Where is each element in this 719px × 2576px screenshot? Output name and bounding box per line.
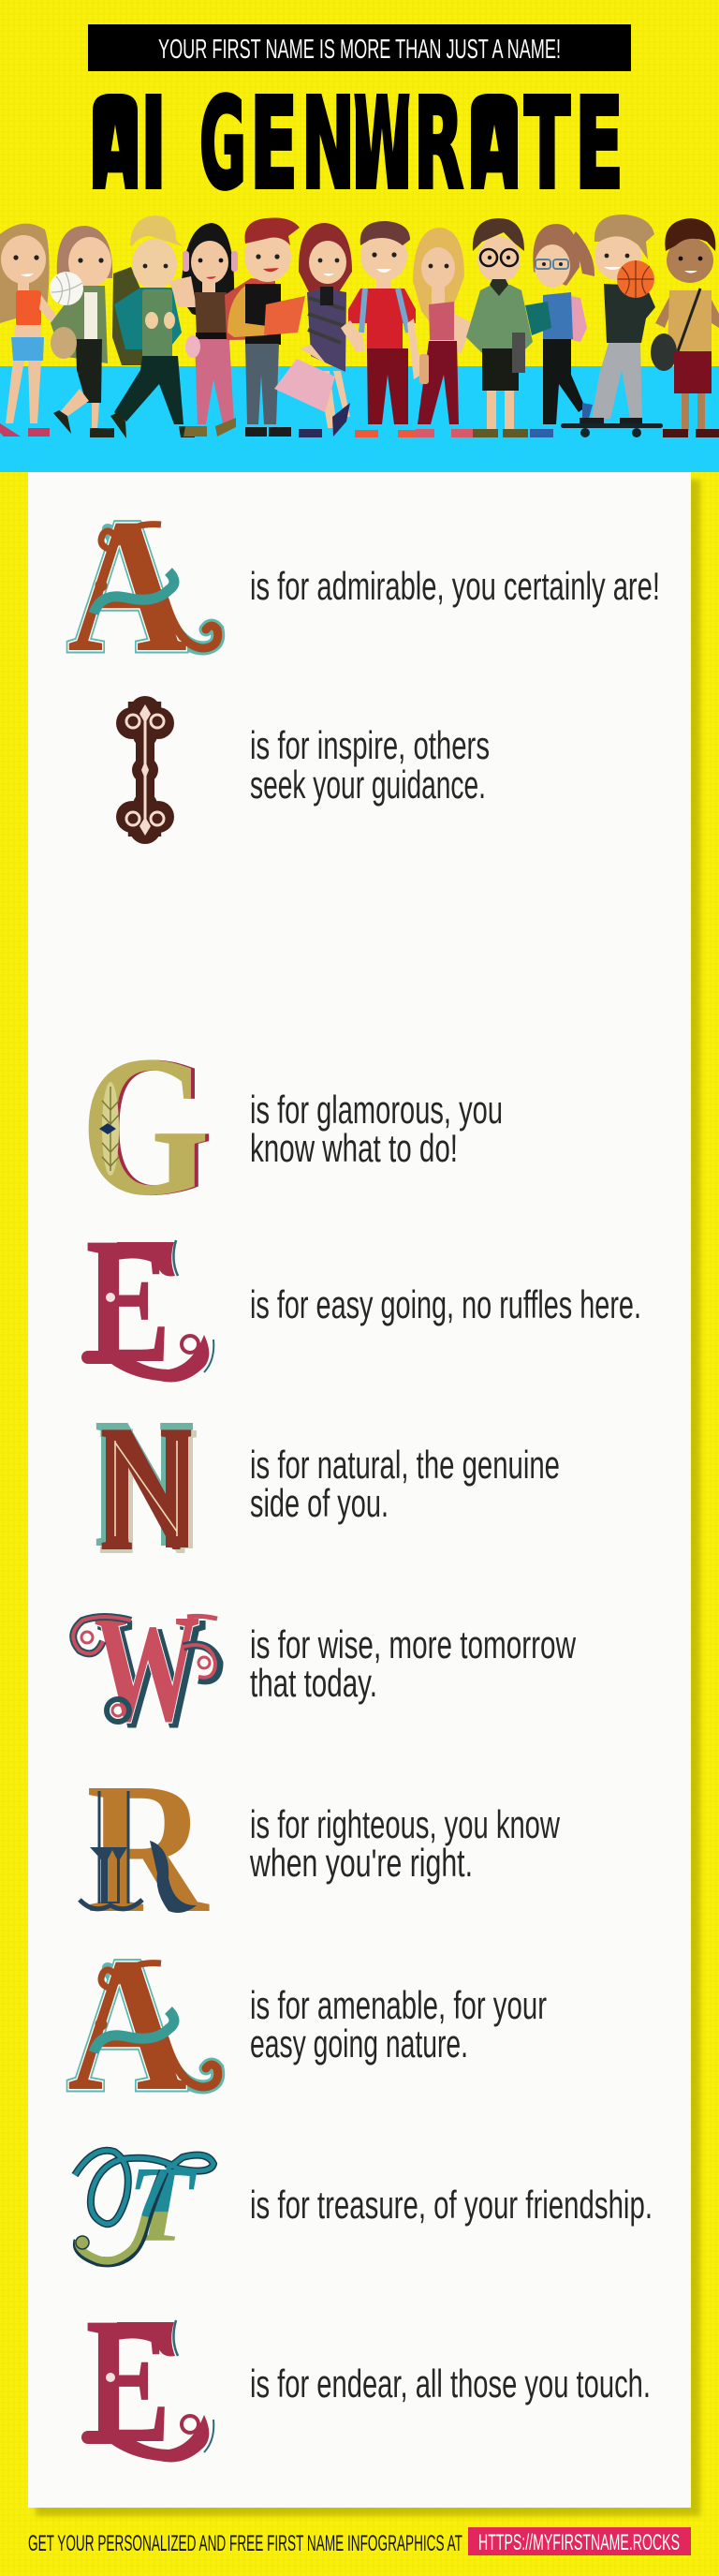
character: girl with ponytail and tablet [525, 224, 594, 437]
character: boy in yellow tank top [651, 218, 719, 437]
character: girl in orange top [0, 224, 62, 437]
title: AI GENWRATE: N [301, 73, 355, 217]
description: natural: is for natural, the genuine [250, 1443, 560, 1487]
title: AI GENWRATE: E [575, 73, 624, 217]
character: girl with pink bag [274, 223, 352, 437]
description: wise: is for wise, more tomorrow [250, 1622, 576, 1666]
ornamental letter A: A [67, 1918, 187, 2131]
letter row: I: seek your guidance. [250, 762, 486, 807]
letter row: A second: easy going nature. [250, 2021, 468, 2065]
character: boy in red shirt [341, 221, 426, 437]
ornamental letter N: N [97, 1387, 198, 1594]
letter row: W [73, 1582, 576, 1757]
white panel [28, 472, 691, 2508]
character: boy with cap and backpack [110, 215, 195, 438]
letter row: N: side of you. [250, 1481, 389, 1525]
letter row: R [80, 1745, 560, 1952]
ornamental letter E: E [86, 1203, 170, 1399]
letter row: W: that today. [250, 1661, 377, 1705]
letter row: I [116, 653, 490, 881]
description: amenable: is for amenable, for your [250, 1983, 547, 2027]
letter row: R: when you're right. [249, 1841, 473, 1885]
ornamental letter I [116, 653, 174, 881]
description: glamorous: is for glamorous, you [250, 1088, 503, 1132]
ornamental letter R: R [86, 1745, 210, 1952]
description: righteous: is for righteous, you know [250, 1802, 560, 1846]
ornamental letter W: W [94, 1582, 200, 1754]
ornamental letter G: G [84, 1014, 213, 1237]
title: AI GENWRATE: E [250, 73, 298, 217]
character: blonde girl [413, 228, 474, 437]
ornamental letter A: A [67, 480, 187, 692]
character: boy with book and red backpack [225, 217, 305, 437]
blue floor band [0, 366, 719, 472]
letter row: G: know what to do! [250, 1126, 458, 1170]
title: AI GENWRATE: I [140, 73, 167, 217]
title: AI GENWRATE [93, 73, 624, 217]
ornamental letter N: N [99, 1387, 193, 1590]
letter row: A [67, 480, 660, 692]
letter row: G [81, 1014, 503, 1237]
ornamental letter G: G [81, 1014, 210, 1237]
letter row: N [94, 1380, 560, 1594]
illustration: group of students [0, 215, 719, 438]
panel shadow [36, 480, 700, 2516]
title: AI GENWRATE: A [472, 73, 517, 217]
header banner [88, 24, 631, 71]
character: boy on skateboard with basketball [561, 215, 663, 437]
ornamental letter I: I [125, 653, 165, 881]
ornamental letter T: T [127, 2145, 198, 2265]
ornamental letter A: A [67, 1918, 187, 2131]
title: AI GENWRATE: G [199, 73, 246, 217]
character: girl with volleyball [50, 226, 114, 437]
letter row: E [81, 1203, 641, 1399]
letter row: T [75, 2145, 653, 2265]
title: AI GENWRATE: A [94, 73, 137, 217]
letter row: A second [67, 1918, 547, 2131]
ornamental letter A: A [67, 480, 187, 692]
letter row: E second [81, 2283, 651, 2480]
ornamental letter W: W [97, 1586, 206, 1757]
description: inspire: is for inspire, others [250, 723, 490, 767]
character: girl with black hair and headphones [169, 223, 238, 437]
ornamental letter T [75, 2145, 213, 2265]
character: boy with glasses and green sweater [466, 218, 533, 437]
title: AI GENWRATE: T [524, 73, 570, 217]
title: AI GENWRATE: R [414, 73, 463, 217]
ornamental letter E: E [86, 2283, 170, 2480]
ornamental letter N: N [94, 1380, 195, 1587]
title: AI GENWRATE: W [354, 73, 410, 217]
